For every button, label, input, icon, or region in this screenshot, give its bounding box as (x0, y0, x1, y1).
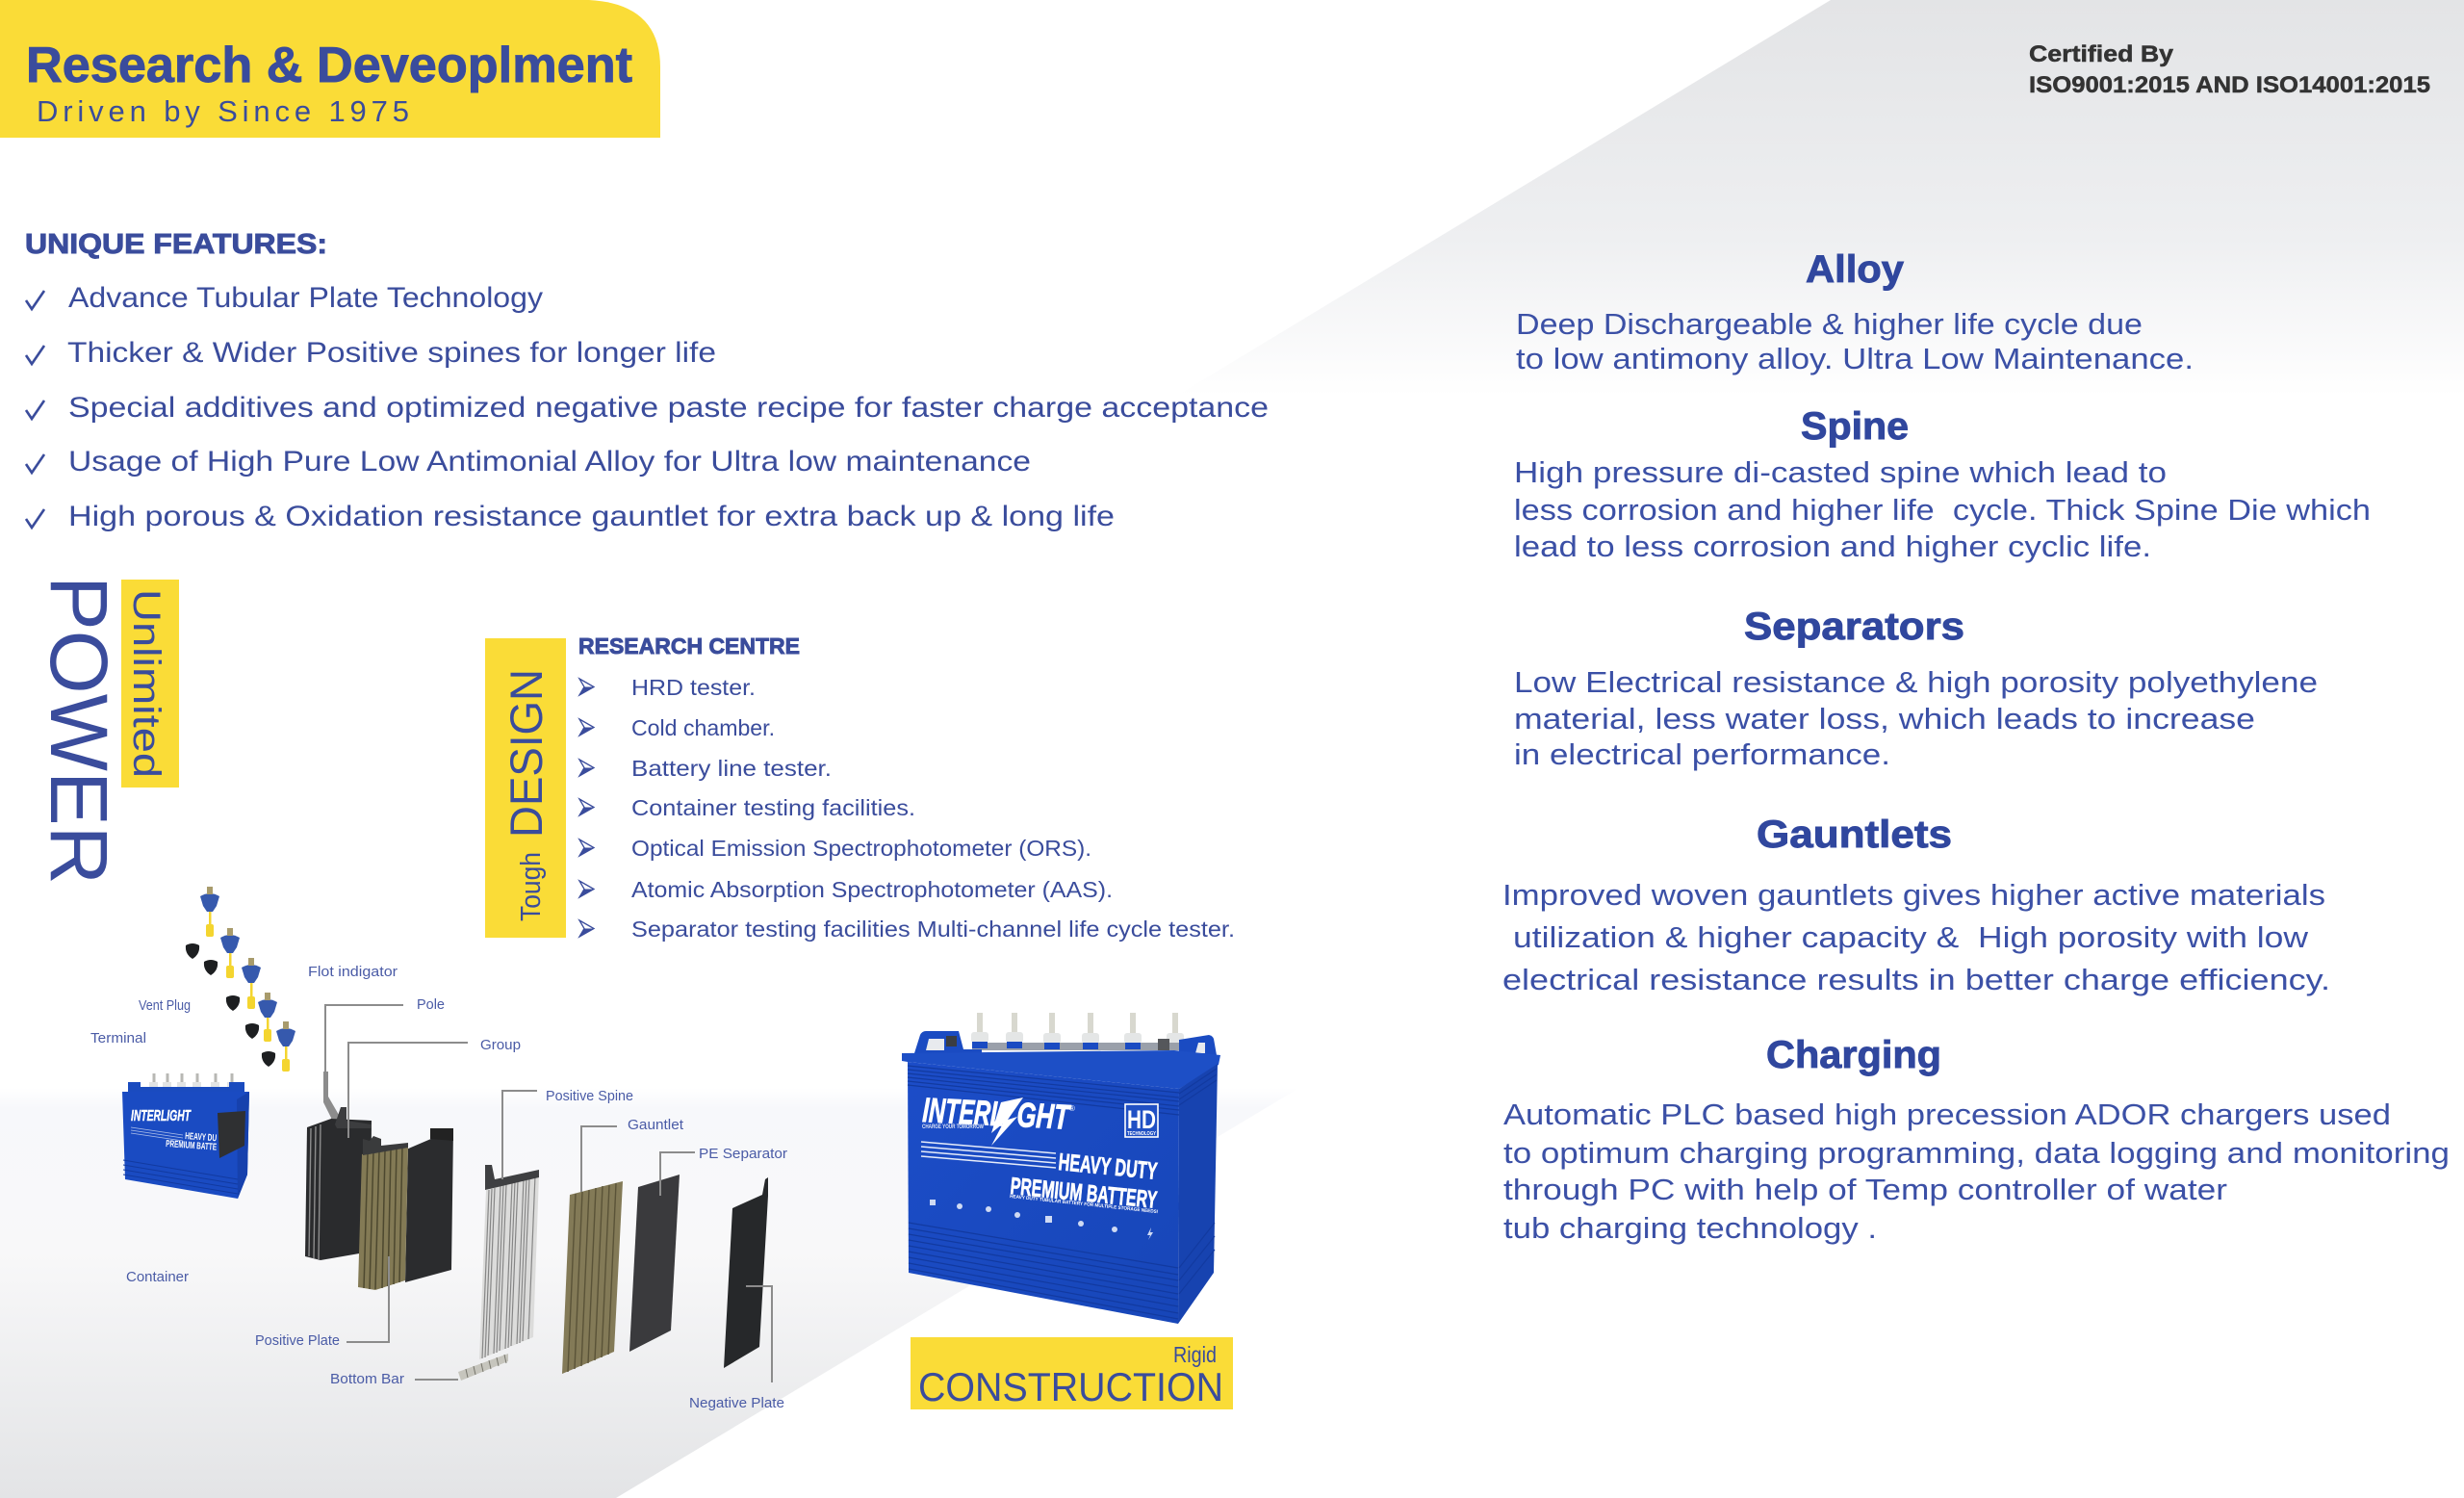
panel: spine: Spine (1801, 405, 1909, 448)
part labels: Positive Spine (546, 1088, 633, 1104)
panel: separators: Separators (1744, 606, 1964, 648)
part labels: Flot indigator (308, 964, 398, 980)
panel: charging: Charging (1766, 1034, 1941, 1076)
title: Research & Deveoplment (26, 38, 632, 93)
part: PE separator (629, 1175, 680, 1352)
panel: separators: Low Electrical resistance & high porosity polyethylene (1514, 665, 2318, 699)
feature 2: Thicker & Wider Positive spines for longer life (67, 337, 716, 369)
panel: alloy (1516, 248, 2194, 375)
product name: PREMIUM BATTERY (1009, 1173, 1159, 1214)
part labels: Gauntlet (628, 1117, 684, 1133)
exploded battery parts (305, 1005, 772, 1382)
panel: gauntlets: utilization & higher capacity & High porosity with low (1513, 920, 2309, 954)
rigid construction label (911, 1337, 1233, 1409)
feature icons (930, 1200, 1153, 1240)
tough design label: Tough (516, 852, 547, 921)
panel: separators: in electrical performance. (1514, 737, 1890, 771)
title banner (0, 0, 660, 138)
item 1: HRD tester. (631, 675, 756, 700)
panel: separators: material, less water loss, which leads to increase (1514, 702, 2255, 736)
stripes (921, 1142, 1056, 1168)
panel: charging: through PC with help of Temp controller of water (1503, 1173, 2227, 1206)
panel: charging: tub charging technology . (1503, 1211, 1877, 1245)
logo: GHT (1016, 1095, 1072, 1137)
panel: alloy: Deep Dischargeable & higher life cycle due (1516, 307, 2143, 341)
panel: spine (1514, 405, 2371, 563)
panel: separators (1514, 606, 2318, 771)
panel: charging: to optimum charging programming, data logging and monitoring (1503, 1136, 2450, 1170)
item 7: Separator testing facilities Multi-channel life cycle tester. (631, 917, 1235, 942)
panel: alloy: to low antimony alloy. Ultra Low Maintenance. (1516, 342, 2194, 375)
HD badge: HD (1127, 1105, 1156, 1134)
part: negative plate (724, 1177, 768, 1368)
product name: HEAVY DUTY (1057, 1149, 1159, 1185)
subtitle: Driven by Since 1975 (37, 94, 409, 128)
terminals (971, 1013, 1184, 1049)
part labels: Terminal (90, 1030, 146, 1046)
panel: gauntlets: electrical resistance results in better charge efficiency. (1502, 963, 2330, 996)
small battery (122, 1073, 249, 1199)
feature 3: Special additives and optimized negative paste recipe for faster charge acceptance (68, 392, 1269, 424)
certification (2029, 41, 2430, 98)
part labels: Container (126, 1269, 189, 1285)
logo: ® (1069, 1104, 1075, 1113)
panel: research centre (578, 633, 1235, 942)
item 4: Container testing facilities. (631, 795, 915, 820)
vent plugs and float indicators (186, 887, 295, 1072)
unlimited power label: Unlimited (125, 589, 167, 778)
logo: CHARGE YOUR TOMORROW (922, 1124, 984, 1130)
tough design label: DESIGN (500, 669, 552, 838)
battery body (908, 1062, 1179, 1324)
leader lines (325, 1005, 772, 1382)
HD badge: TECHNOLOGY (1127, 1131, 1157, 1137)
tough design label (485, 638, 566, 938)
rigid construction label: CONSTRUCTION (918, 1364, 1223, 1409)
large battery (902, 1013, 1220, 1324)
item 3: Battery line tester. (631, 756, 832, 781)
unlimited power label (34, 576, 179, 885)
small battery: HEAVY DU (185, 1131, 217, 1144)
panel: spine: lead to less corrosion and higher cyclic life. (1514, 529, 2151, 563)
part labels: Vent Plug (139, 997, 191, 1014)
panel: charging (1503, 1034, 2450, 1245)
panel: gauntlets: Improved woven gauntlets gives higher active materials (1502, 878, 2325, 912)
part: positive spine (479, 1165, 539, 1359)
product name (1009, 1149, 1159, 1215)
item 2: Cold chamber. (631, 715, 775, 740)
logo: INTERL (922, 1090, 1006, 1133)
part labels: Positive Plate (255, 1332, 340, 1349)
part: bottom bar (458, 1354, 508, 1381)
feature 4: Usage of High Pure Low Antimonial Alloy for Ultra low maintenance (68, 446, 1031, 478)
part labels: Group (480, 1037, 521, 1053)
unlimited power label: POWER (34, 576, 124, 885)
rigid construction label: Rigid (1173, 1342, 1217, 1367)
part labels (90, 964, 787, 1411)
panel: alloy: Alloy (1806, 248, 1905, 291)
product name: HEAVY DUTY TUBULAR BATTERY FOR MULTIPLE STORAGE NEEDS! (1010, 1194, 1159, 1215)
panel: unique features (25, 229, 1269, 532)
part labels: Bottom Bar (330, 1371, 404, 1387)
heading: unique features: UNIQUE FEATURES: (25, 229, 327, 260)
handles and lid (914, 1031, 982, 1053)
panel: spine: less corrosion and higher life cycle. Thick Spine Die which (1514, 493, 2371, 527)
feature 5: High porous & Oxidation resistance gauntlet for extra back up & long life (68, 501, 1115, 532)
small battery logo: INTERLIGHT (131, 1108, 192, 1124)
panel: gauntlets: Gauntlets (1757, 814, 1952, 856)
panel: charging: Automatic PLC based high precession ADOR chargers used (1503, 1098, 2391, 1131)
part labels: PE Separator (699, 1146, 787, 1162)
certification: Certified By (2029, 41, 2174, 67)
logo (922, 1090, 1075, 1146)
part labels: Negative Plate (689, 1395, 784, 1411)
part: gauntlet (562, 1181, 623, 1374)
top deck (972, 1043, 1179, 1050)
panel: spine: High pressure di-casted spine which lead to (1514, 455, 2167, 489)
panel: gauntlets (1502, 814, 2330, 996)
part: group plates (305, 1107, 453, 1290)
heading: research centre: RESEARCH CENTRE (578, 633, 800, 659)
item 1 (579, 675, 756, 700)
ribs (908, 1066, 1217, 1319)
part labels: Pole (417, 996, 445, 1013)
item 6: Atomic Absorption Spectrophotometer (AAS). (631, 877, 1113, 902)
item 5: Optical Emission Spectrophotometer (ORS). (631, 836, 1091, 861)
feature 1: Advance Tubular Plate Technology (68, 282, 543, 314)
part: pole (323, 1072, 339, 1128)
small battery: PREMIUM BATTE (166, 1139, 218, 1153)
certification: ISO9001:2015 AND ISO14001:2015 (2029, 72, 2430, 98)
